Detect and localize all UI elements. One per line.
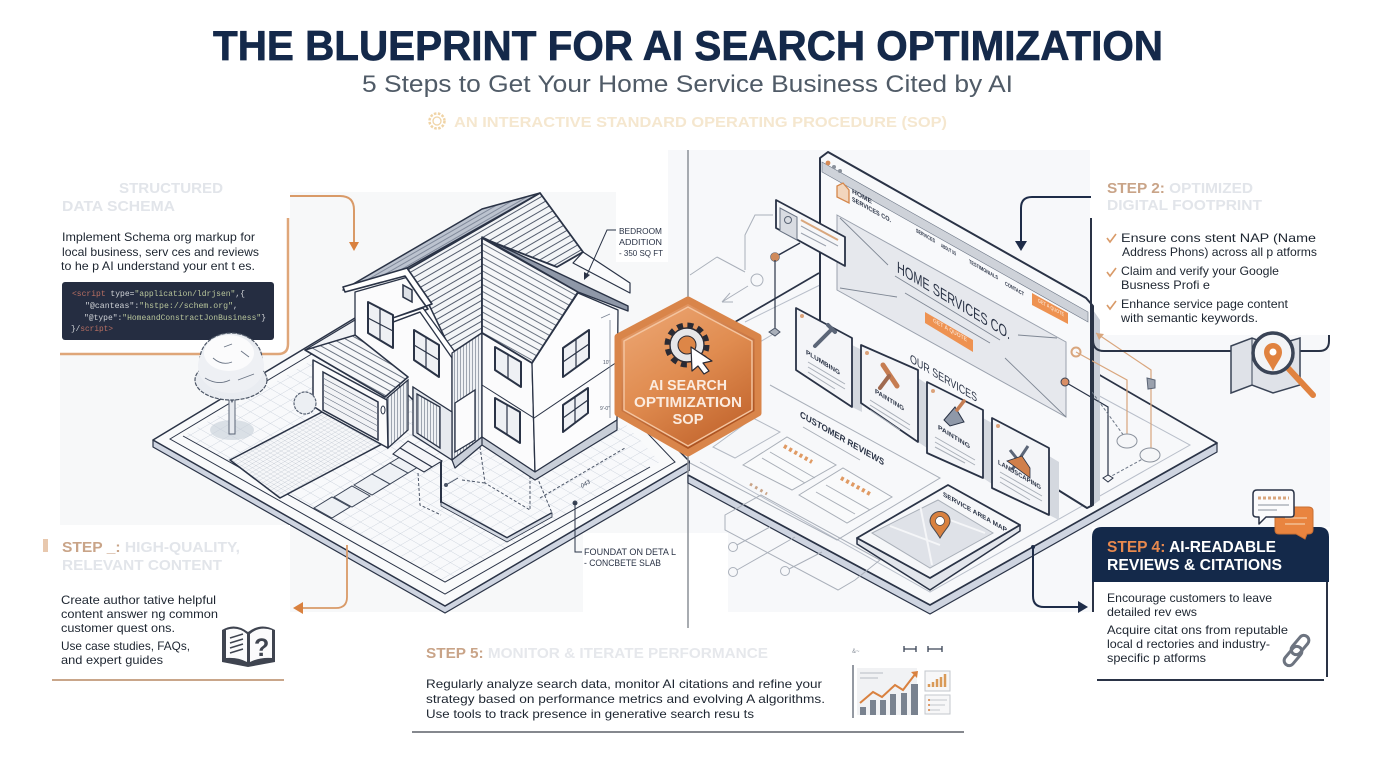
- central siding wall: [452, 333, 482, 460]
- icon: link: [1282, 633, 1311, 668]
- body text: [61, 230, 259, 273]
- isometric website mockup: [688, 152, 1217, 614]
- code box: [62, 282, 274, 340]
- main roof: [343, 193, 583, 353]
- card plumbing: PLUMBING: [806, 349, 840, 377]
- reviews heading: CUSTOMER REVIEWS: [800, 410, 884, 469]
- arrow to panel: [1031, 545, 1088, 613]
- checklist: Address Phons) across all p atforms: [1122, 245, 1317, 259]
- panel rule: [52, 679, 284, 681]
- arrow from platform: [293, 545, 347, 614]
- card shadows: [852, 345, 1059, 520]
- shrub: [294, 392, 316, 414]
- site logo: [837, 183, 891, 224]
- badge inner hexagon: [624, 307, 752, 446]
- site logo: SERVICES CO.: [852, 196, 891, 224]
- illustration backdrop left: [60, 192, 688, 612]
- card painting: PAINTING: [875, 388, 904, 413]
- attic vent: [403, 285, 412, 302]
- middle gable trim: [393, 308, 455, 358]
- panel: step 1 structured data schema: [60, 178, 359, 354]
- body text: [61, 593, 218, 667]
- hero button: [925, 312, 973, 352]
- body text: Use tools to track presence in generative search resu ts: [426, 707, 754, 721]
- dark bracket: [1091, 218, 1329, 507]
- left platform: [153, 250, 690, 613]
- card landscaping: [992, 418, 1049, 515]
- tree: [195, 333, 267, 440]
- chart icon: [852, 646, 950, 718]
- body text: local d rectories and industry-: [1107, 637, 1270, 651]
- badge label: SOP: [672, 412, 704, 428]
- card landscaping: LANDSCAPING: [998, 459, 1041, 492]
- icon: book: [222, 626, 275, 667]
- right wing foundation band: [452, 420, 617, 480]
- step marker: [43, 539, 48, 552]
- browser shadow: [1093, 310, 1100, 505]
- body text: customer quest ons.: [61, 621, 175, 635]
- icon: book: ?: [254, 634, 269, 662]
- header button: GET A QUOTE: [1038, 298, 1064, 318]
- right gable dark eave: [482, 237, 628, 311]
- right wing left face: [482, 333, 535, 472]
- panel border: [1093, 582, 1327, 680]
- code box: "@type":"HomeandConstractJonBusiness"}: [84, 314, 266, 323]
- heading: STEP 2: OPTIMIZED: [1107, 180, 1253, 197]
- body text: detailed rev ews: [1107, 605, 1197, 619]
- title: THE BLUEPRINT FOR AI SEARCH OPTIMIZATION: [213, 22, 1163, 69]
- hero button: GET A QUOTE: [933, 317, 968, 344]
- garage door: [323, 372, 378, 440]
- panel: step 3 high-quality content: RELEVANT CONTENT: [62, 557, 222, 574]
- heading: STRUCTURED: [119, 180, 223, 197]
- service cards: [796, 308, 1059, 520]
- services heading: OUR SERVICES: [910, 351, 977, 405]
- hero panel: [837, 215, 1066, 417]
- wire boxes bottom: [725, 495, 880, 590]
- nav links: [916, 228, 1024, 298]
- checklist: [1107, 231, 1317, 325]
- body text: Acquire citat ons from reputable: [1107, 623, 1288, 637]
- callout: foundation detail: FOUNDAT ON DETA L: [584, 547, 676, 557]
- callout: bedroom addition: - 350 SQ FT: [619, 249, 663, 258]
- isometric house blueprint: [153, 193, 690, 613]
- badge gear icon: [667, 325, 712, 374]
- garage roof: [305, 335, 408, 397]
- body text: Use case studies, FAQs,: [61, 639, 190, 653]
- review cards: [713, 418, 892, 523]
- foundation slab outline: 043: [580, 479, 592, 490]
- panel: step 5 monitor and iterate: [412, 645, 964, 732]
- foundation slab outline: [418, 447, 625, 542]
- body text: to he p AI understand your ent t es.: [61, 259, 255, 273]
- arrow to browser: [1015, 197, 1091, 251]
- card drainage: [927, 382, 983, 478]
- panel: step 1 structured data schema: DATA SCHEMA: [62, 198, 175, 215]
- card drainage: PAINTING: [938, 424, 970, 451]
- checklist: Enhance service page content: [1121, 297, 1289, 311]
- body text: and expert guides: [61, 653, 163, 667]
- hero title: HOME SERVICES CO.: [897, 257, 1010, 343]
- panel: step 3 high-quality content: [43, 525, 347, 680]
- house windows: [368, 302, 589, 443]
- map card: [857, 485, 1020, 590]
- callout: bedroom addition: BEDROOM: [619, 227, 662, 236]
- tagline: AN INTERACTIVE STANDARD OPERATING PROCEDURE (SOP): [454, 114, 947, 131]
- nav links: TESTIMONIALS: [969, 259, 998, 282]
- callout: foundation detail: [572, 500, 676, 568]
- arrow to house: [290, 196, 359, 251]
- card plumbing: [796, 308, 852, 407]
- garage side: [387, 380, 408, 448]
- badge hexagon: [618, 300, 758, 453]
- icon: map with magnifier: [1231, 333, 1313, 395]
- heading: STEP 5: MONITOR & ITERATE PERFORMANCE: [426, 645, 768, 662]
- body text: Encourage customers to leave: [1107, 591, 1272, 605]
- body text: content answer ng common: [61, 607, 218, 621]
- garage left roof slope: [305, 320, 355, 350]
- nav links: ABOUT US: [941, 243, 956, 258]
- heading: STEP 4: AI-READABLE: [1107, 539, 1276, 556]
- dimension marks: [600, 314, 610, 418]
- map card: SERVICE AREA MAP: [943, 491, 1007, 535]
- nav links: SERVICES: [916, 228, 935, 245]
- body background: [1092, 582, 1329, 680]
- porch steps: [393, 441, 442, 472]
- checklist: Ensure cons stent NAP (Name: [1121, 231, 1316, 245]
- callout bedroom strip: [573, 252, 630, 293]
- right wing right face: [532, 293, 618, 472]
- body text: strategy based on performance metrics and evolving A algorithms.: [426, 692, 825, 706]
- right platform: [688, 273, 1217, 614]
- callout: bedroom addition: [584, 227, 663, 280]
- central badge: [618, 300, 758, 453]
- dimension marks: 9'-0": [600, 406, 610, 412]
- panel rule: [412, 731, 964, 733]
- site logo: HOME: [852, 188, 872, 206]
- callout: bedroom addition: ADDITION: [619, 238, 662, 247]
- panel: step 2 digital footprint: DIGITAL FOOTPRINT: [1107, 197, 1262, 214]
- card painting: [861, 345, 918, 442]
- chart icon: &~: [852, 649, 860, 655]
- checklist: with semantic keywords.: [1120, 311, 1258, 325]
- title block: [213, 22, 1163, 131]
- garage lamp: [381, 406, 385, 414]
- checklist: Busness Profi e: [1121, 278, 1210, 292]
- body text: Create author tative helpful: [61, 593, 216, 607]
- illustration backdrop right: [668, 150, 1330, 612]
- body text: [1107, 591, 1288, 665]
- profile card: [769, 200, 845, 336]
- body text: local business, serv ces and reviews: [62, 245, 259, 259]
- subtitle: 5 Steps to Get Your Home Service Business Cited by AI: [362, 71, 1013, 98]
- porch: [413, 387, 475, 460]
- floor lines: [482, 362, 617, 418]
- right gable roof plane: [482, 238, 578, 363]
- panel: step 4 reviews and citations: REVIEWS & CITATIONS: [1107, 557, 1282, 574]
- header button: [1032, 293, 1068, 324]
- panel: step 2 digital footprint: [1015, 150, 1340, 507]
- dormer trim: [343, 268, 432, 322]
- icon: speech bubbles: [1253, 490, 1313, 539]
- body text: specific p atforms: [1107, 651, 1206, 665]
- browser title bar: [822, 162, 1088, 322]
- code box: }/script>: [71, 325, 113, 334]
- orange panel border: [60, 218, 288, 354]
- nav links: CONTACT: [1005, 281, 1024, 298]
- dimension marks: 10': [603, 360, 610, 366]
- map pin: [930, 512, 950, 538]
- code box: <script type="application/ldrjsen",{: [72, 290, 245, 299]
- reviews area: [690, 385, 940, 540]
- panel: step 4 reviews and citations: [1031, 490, 1329, 680]
- callout: foundation detail: - CONCBETE SLAB: [584, 558, 661, 568]
- badge label: AI SEARCH: [649, 378, 727, 394]
- body text: [426, 677, 825, 721]
- body text: Regularly analyze search data, monitor AI citations and refine your: [426, 677, 822, 691]
- walkway stones: [314, 454, 423, 518]
- code box: "@canteas":"hstpe://schem.org" ,: [85, 302, 238, 311]
- badge label: [634, 378, 742, 428]
- heading: STEP _: HIGH-QUALITY,: [62, 539, 240, 556]
- browser window: [820, 152, 1093, 508]
- left upper gable wall: [355, 277, 452, 413]
- center divider: [687, 150, 689, 628]
- driveway: [230, 412, 382, 498]
- garage front wall: [313, 360, 388, 448]
- right connector lines: [1061, 333, 1160, 482]
- window controls: [826, 161, 842, 173]
- orange arrow tip: [1096, 333, 1104, 340]
- body text: Implement Schema org markup for: [62, 230, 255, 244]
- badge label: OPTIMIZATION: [634, 395, 742, 411]
- checklist: Claim and verify your Google: [1121, 264, 1279, 278]
- hero lines: [840, 218, 1066, 417]
- back thin wiring: [690, 215, 773, 302]
- header: [1092, 527, 1329, 582]
